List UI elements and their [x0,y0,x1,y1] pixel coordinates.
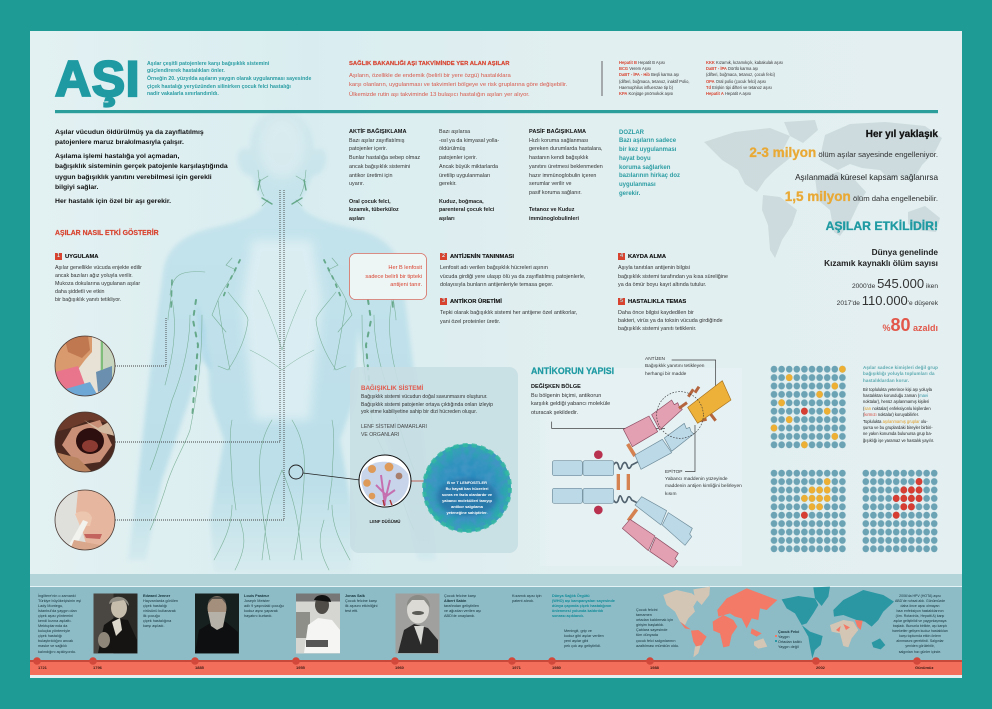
timeline 1980 note [564,629,604,648]
stats: deaths prevented [749,129,938,335]
step 5: bakteri, virüs ya da toksin vücuda girdiğinde [618,318,723,324]
timeline WHO: sonrası açıklandı. [552,614,584,618]
step 5: HASTALIKLA TEMAS [628,299,686,305]
timeline 1721 [38,594,81,654]
variable region text: DEĞİŞKEN BÖLGE [531,384,581,390]
antigen text: herhangi bir madde [645,372,686,377]
text: vaccination calendar: Aşıların, özellikle de endemik (belirli bir yere özgü) hastalıklara [349,72,511,78]
timeline 1988: girişim başlatıldı. [636,623,664,627]
timeline today: (örn. Rotavirüs, Hepatit A) karşı [896,614,944,618]
timeline years: 1885 [195,665,204,670]
timeline years: 1721 [38,665,47,670]
step 3: Tepki olarak bağışıklık sistemi her antijene özel antikorlar, [440,310,577,316]
step 3 [440,298,577,325]
intro text: güçlendirerek hastalıkları önler. [147,68,225,74]
map legend: Yaygın değil [778,645,799,649]
timeline 1980 note: yeni aşılar gibi [564,639,588,643]
stats: deaths prevented: 2-3 milyon ölüm aşılar sayesinde engelleniyor. [749,145,938,160]
map: polio endemic [663,587,777,657]
active immunity: Bazı aşılar zayıflatılmış [349,138,404,144]
active immunity: kızamık, tüberküloz [349,207,399,213]
immune system text: BAĞIŞIKLIK SİSTEMİ [361,385,423,392]
doses: bazılarının hirkaç doz [619,173,680,179]
body figure [128,112,436,572]
herd immunity text [863,365,938,443]
timeline 1971: Kızamık aşısı için [512,594,542,598]
herd immunity text: (sarı noktalar) enfeksiyonlu kişilerden [863,406,931,411]
herd immunity text: Bir toplulukta yeterince kişi aşı yoluyla [863,387,932,392]
step 4: 4 [620,253,623,259]
lymphocyte cell [423,444,511,532]
passive immunity: PASİF BAĞIŞIKLAMA [529,129,586,135]
text: how vaccines work: Aşılama işlemi hastalığa yol açmadan, [55,153,179,160]
timeline Pasteur: adlı 9 yaşındaki çocuğu [244,604,284,608]
passive immunity: hastanın kendi bağışıklık [529,155,588,161]
text: how vaccines work: bağışıklık sisteminin gerçek patojenle karşılaştığında [55,163,228,170]
timeline Jenner: Hayvanlarda görülen [143,599,178,603]
step 4: bağışıklık sistemi tarafından ya kısa süreliğine [618,274,728,280]
timeline WHO: dünya çapında çiçek hastalığının [552,604,611,608]
timeline 1721: İngiltere'nin o zamanki [38,594,76,598]
timeline today: ABD'de ruhsat aldı. Günümüzde [895,599,945,603]
timeline Sabin: ABD'de onaylandı. [444,614,475,618]
step 1: 1 [57,253,60,259]
vaccine list 2: Td Erişkin tipi difteri ve tetanoz aşısı [706,85,772,90]
immune system description: Bağışıklık sistemi patojenler ortaya çıktığında onları izleyip [361,402,493,408]
vaccine list 2: (difteri, boğmaca, tetanoz, çocuk felci) [706,72,775,77]
stats: deaths prevented: Kızamık kaynaklı ölüm sayısı [824,258,938,268]
timeline Jenner [143,594,178,628]
inactive vaccines: patojenler içerir. [439,155,477,161]
herd immunity text: Aşılar sadece kimişleri değil grup [863,365,938,370]
doses [619,130,680,197]
stats: deaths prevented: Dünya genelinde [872,247,938,257]
inactive vaccines: parenteral çocuk felci [439,207,494,213]
timeline Salk [345,594,378,613]
step 4 [618,253,728,288]
antigen text: Bağışıklık yanıtını tetikleyen [645,364,704,369]
passive immunity: Hızlı koruma sağlanması [529,138,588,144]
immune system description: Bağışıklık sistemi vücudun doğal savunmasını oluşturur. [361,394,488,400]
doses: gerekir. [619,191,640,197]
map legend swatches [775,635,777,642]
timeline Sabin: Çocuk felcine karşı [444,594,476,598]
passive immunity [529,128,603,222]
timeline today: alınmasını gerektirdi. Salgınlar [896,639,944,643]
passive immunity: yanıtını üretmesi beklenmeden [529,164,603,170]
dot chart: unvaccinated cluster [770,469,846,553]
herd immunity text: bağışıklığı yoluyla toplumları da [863,371,935,376]
timeline today: salgınları hızı günler içinde. [899,650,941,654]
stats: deaths prevented: Aşılanmada küresel kapsam sağlanırsa [795,173,938,182]
timeline today: 2006'da HPV (HOTA) aşısı [899,594,941,598]
step 1: bir bağışıklık yanıtı tetikliyor. [55,297,121,303]
stats: deaths prevented: Her yıl yaklaşık [866,129,938,140]
step 1: daha şiddetli ve etkin [55,289,104,295]
text: how vaccines work: Aşılar vücudun öldürülmüş ya da zayıflatılmış [55,129,204,136]
passive immunity: gereken durumlarda hastalara, [529,146,602,152]
timeline Pasteur: kuduz aşısı yaparak [244,609,278,613]
text: vaccination calendar [349,72,567,98]
map legend: Çocuk Felci [778,630,799,634]
step 1 [55,253,142,303]
divider: vaccine list [602,61,603,96]
title: AŞI [55,51,140,107]
photo outline [55,412,115,472]
panel: antibody [540,368,742,566]
vaccine list 2: DaBT - İPA Dörtlü karma aşı [706,66,758,71]
step 2 [440,253,585,288]
lymph label [361,423,427,438]
herd immunity text: hastalıktan korunduğu zaman (mavi [863,393,928,398]
herd immunity text: ne yakın konumda bulunursa grup ba- [863,431,932,436]
lymph node pointer [289,465,426,481]
stats: deaths prevented: AŞILAR ETKİLİDİR! [826,219,938,233]
timeline Jenner: çiçek hastalığı [143,604,167,608]
callout text: Her B lenfosit [388,265,422,271]
timeline Jenner: virüsünü kullanarak [143,609,176,613]
timeline 1971 [512,594,542,603]
doses: DOZLAR [619,130,644,136]
heading: how it works: AŞILAR NASIL ETKİ GÖSTERİR [55,230,159,237]
step 2: 2 [442,253,445,259]
active immunity: aşıları [349,216,365,222]
active immunity: uyarır. [349,181,364,187]
herd immunity text: hastalıklardan korur. [863,378,909,383]
epitope text: EPİTOP [665,470,683,474]
vaccine list 2: Hepatit A Hepatit A aşısı [706,91,751,96]
passive immunity: hazır immünoglobulin içeren [529,173,596,179]
timeline 1988 [636,608,679,648]
doses: Bazı aşıların sadece [619,138,676,144]
callout text [365,265,422,288]
timeline 1721: maske ve sağlıklı [38,644,67,648]
step 2: Lenfosit adı verilen bağışıklık hücreleri aşının [440,265,548,271]
timeline 1988: çocuk felci salgınlarının [636,639,675,643]
timeline Sabin [444,594,481,618]
lymphocyte text: yabancı molekülleri tanıyıp [442,498,492,503]
active immunity [349,128,420,222]
panel: timeline background [30,574,962,678]
lymph node label: LENF DÜĞÜMÜ [370,519,400,524]
step 3: 3 [442,298,445,304]
variable region text [531,383,610,416]
lymphocyte text: yeteneğine sahiptirler. [446,510,488,515]
timeline years: 1960 [395,665,404,670]
step 1: Aşılar genellikle vücuda enjekte edilir [55,265,142,271]
inactive vaccines: Kuduz, boğmaca, [439,199,484,205]
step 3: yani özel proteinler üretir. [440,319,500,325]
passive immunity: Tetanoz ve Kuduz [529,207,574,213]
timeline Pasteur [244,594,284,618]
portrait: Jonas Salk [296,594,340,654]
step 2: dolayısıyla bunların antijenleriyle temasa geçer. [440,282,553,288]
step 1: Mukoza dokularına uygulanan aşılar [55,281,140,287]
timeline markers [33,657,921,665]
herd immunity text: noktalar), henüz aşılanmamış kişileri [863,399,929,404]
timeline Pasteur: Joseph Meister [244,599,270,603]
timeline years: 1796 [93,665,102,670]
portrait: Albert Sabin [396,594,440,654]
passive immunity: serumlar verilir ve [529,181,572,187]
lymphocyte text: B ve T LENFOSİTLER [447,480,487,485]
herd immunity text: şursa ve bu gruplardaki bireyler birbiri- [863,425,933,430]
inactive vaccines: üretilip uygulanmaları [439,173,490,179]
step 5: 5 [620,298,623,304]
timeline Sabin: Albert Sabin [444,599,466,603]
step 1: ancak bazıları ağız yoluyla verilir. [55,273,133,279]
inactive vaccines: Ancak büyük miktarlarda [439,164,498,170]
step 4: KAYDA ALMA [628,254,666,260]
text: how vaccines work [55,129,228,205]
timeline 1721: bulaştırıldığını ancak [38,639,73,643]
stats: deaths prevented: 1,5 milyon ölüm daha engellenebilir. [785,189,938,204]
world map background [704,120,942,258]
step 4: Aşıyla tanıtılan antijenin bilgisi [618,265,690,271]
timeline Jenner: Edward Jenner [143,594,170,598]
epitope text: maddenin antijen kimliğini belirleyen [665,484,742,489]
step 5: Daha önce bilgisi kaydedilen bir [618,310,694,316]
timeline 1988: tüm dünyada [636,633,658,637]
timeline today: karşı toplumda etkin önlem [899,634,941,638]
timeline WHO: (WHO) aşı kampanyaları sayesinde [552,599,615,603]
epitope text: Yabancı maddenin yüzeyinde [665,477,728,482]
immune system description [361,394,493,415]
vaccine list 1: KPA Konjüge pnömokok aşısı [619,91,673,96]
timeline 1988: Çocuk felcini [636,608,658,612]
step 1: UYGULAMA [65,254,98,260]
lymphocyte text: sonra en fazla olanlardır ve [442,492,492,497]
active immunity: Bunlar hastalığa sebep olmaz [349,155,420,161]
intro text [147,60,312,97]
map legend: Yaygın [778,635,790,639]
passive immunity: pasif koruma sağlanır. [529,190,582,196]
step 3: ANTİKOR ÜRETİMİ [450,299,502,305]
timeline 1721: Lady Montegu, [38,604,63,608]
vaccine list 1: Haemophilus influenzae tip b) [619,85,673,90]
step 5 [618,298,723,332]
timeline Sabin: tarafından geliştirilen [444,604,479,608]
step 4: ya da ömür boyu kayıt altında tutulur. [618,282,706,288]
dot chart: spread [862,469,938,553]
dotted connector lines [115,190,284,520]
map: polio today [782,587,894,658]
lymph vessels mirrored [282,170,414,570]
timeline Jenner: çiçek hastalığına [143,619,171,623]
timeline 1988: azaltılması mümkün oldu. [636,644,679,648]
timeline 1721: çiçek hastalığı [38,634,62,638]
vaccine list 2 [706,60,783,96]
timeline WHO [552,594,615,618]
callout text: sadece belirli bir tipteki [365,274,422,280]
lymphocyte text: antikor salgılama [451,504,483,509]
lymph label: VE ORGANLARI [361,432,399,438]
timeline today [892,594,948,654]
timeline 1988: tamamen [636,613,652,617]
inactive vaccines: gerekir. [439,181,457,187]
herd immunity text: (kırmızı noktalar) koruyabilirler. [863,412,919,417]
active immunity: antikor üretimi için [349,173,392,179]
timeline 1721: çiçek aşısı yöntemini [38,614,73,618]
timeline Pasteur: Louis Pasteur [244,594,269,598]
timeline Salk: Çocuk felcine karşı [345,599,377,603]
passive immunity: immünoglobulinleri [529,216,579,222]
timeline 1721: Türkiye büyükelçisinin eşi [38,599,81,603]
timeline today: aşılar geliştirildi ve yaygınlaşmaya [894,619,946,623]
timeline Jenner: karşı aşıladı. [143,624,165,628]
timeline years [38,665,934,670]
photo: oral vaccine [55,412,115,472]
antigen text [645,356,704,377]
lymph node [359,455,411,508]
antibody diagram [552,360,731,567]
stats: deaths prevented: 2017'de 110.000'e düşerek [837,293,938,308]
timeline WHO: önlenmesi yolunda kaldırıldı [552,609,603,613]
timeline Salk: Jonas Salk [345,594,365,598]
timeline 1980 note: kuduz gibi aşılar verilen [564,634,604,638]
epitope text: kısım [665,492,676,497]
active immunity: ancak bağışıklık sistemini [349,164,410,170]
vaccine list 1: (difteri, boğmaca, tetanoz, inaktif Polio, [619,79,690,84]
doses: koruma sağlarken [619,165,670,171]
variable region text: Bu bölgenin biçimi, antikorun [531,393,601,399]
timeline years: 1971 [512,665,521,670]
intro text: nadir vakalarla sınırlandırıldı. [147,91,219,97]
active immunity: patojenler içerir. [349,146,387,152]
lymphocyte text [442,480,492,515]
timeline years: 1980 [552,665,561,670]
callout box [350,254,426,300]
text: how vaccines work: bilgiyi sağlar. [55,184,98,191]
inactive vaccines: aşıları [439,216,455,222]
text: how vaccines work: Her hastalık için özel bir aşı gerekir. [55,198,171,205]
antigen text: ANTİJEN [645,357,665,362]
heading: vaccination calendar: SAĞLIK BAKANLIĞI AŞI TAKVİMİNDE YER ALAN AŞILAR [349,61,509,67]
timeline 1988: Çatılara sayesinde [636,628,667,632]
text: vaccination calendar: Ülkemizde rutin aşı takviminde 13 bulaşıcı hastalığın aşıları yer alıyor. [349,92,530,98]
text: vaccination calendar: karşı olanların, uygulanması ve takvimleri bölgeye ve risk gruplarına göre değişebilir. [349,82,567,88]
vaccine list 2: KKK Kızamık, kızamıkçık, kabakulak aşısı [706,60,783,65]
photo outline [55,336,115,396]
timeline today: daha önce aşısı olmayan [901,604,939,608]
intro text: Örneğin 20. yüzyılda aşıların yaygın olarak uygulanması sayesinde [147,76,311,82]
photo: nasal spray [55,490,115,550]
timeline Jenner: ilk çocuğu [143,614,160,618]
portrait: Edward Jenner [94,594,138,654]
lymphocyte text: Bu hayati kan hücreleri [446,486,488,491]
timeline 1971: patent alındı. [512,599,534,603]
inactive vaccines: -ısıl ya da kimyasal yolla- [439,138,499,144]
portrait: Louis Pasteur [195,594,239,654]
text: how vaccines work: uygun bağışıklık yanıtını verebilmesi için gerekli [55,174,212,181]
timeline 1721: kuluçka yöntemiyle [38,629,70,633]
inactive vaccines [439,129,499,222]
panel: immune system [350,367,518,553]
callout text: antijeni tanır. [390,282,422,288]
heading: antibody: ANTİKORUN YAPISI [531,366,614,376]
timeline 1721: kendi kızına aşılattı. [38,619,72,623]
timeline 1721: İstanbul'da yaygın olan [38,609,77,613]
timeline years: 2002 [816,665,825,670]
step 2: ANTİJENİN TANINMASI [450,254,514,260]
step 2: vücuda girdiği yere ulaşıp ölü ya da zayıflatılmış patojenlerle, [440,274,585,280]
timeline Salk: test etti. [345,609,358,613]
herd immunity text: Toplulukta aşılanmamış gruplar olu- [863,419,928,424]
herd immunity text: ğışıklığı işe yaramaz ve hastalık yayılır. [863,438,934,443]
vaccine list 1 [619,60,690,96]
timeline today: hareketler gelişen kuduz hastalıkları [892,629,948,633]
timeline years: 1988 [650,665,659,670]
intro text: çiçek hastalığı yeryüzünden silinirken çocuk felci hastalığı [147,84,291,90]
vaccine list 1: BCG Verem Aşısı [619,66,651,71]
active immunity: Oral çocuk felci, [349,199,391,205]
timeline WHO: Dünya Sağlık Örgütü [552,594,590,598]
photo outline [55,490,115,550]
text: how vaccines work: patojenlere maruz bırakılmasıyla çalışır. [55,139,184,146]
lymph vessels [150,170,282,570]
stats: deaths prevented: 2000'de 545.000 iken [852,276,938,291]
map legend: Ortadan kalktı [778,640,802,644]
timeline Pasteur: hayatını kurtardı. [244,614,272,618]
step 5: bağışıklık sistemi yanıtı tetiklenir. [618,326,696,332]
timeline 1980 note: Meningit, grip ve [564,629,592,633]
variable region text: karşılık geldiği yabancı moleküle [531,401,610,407]
photo: injection [55,336,115,396]
timeline years: 1955 [296,665,305,670]
map legend [778,630,802,649]
intro text: Aşılar çeşitli patojenlere karşı bağışıklık sistemini [147,60,269,66]
vaccine list 2: OPA Oral polio (çocuk felci) aşısı [706,79,766,84]
vaccine list 1: DaBT - İPA - Hib Beşli karma aşı [619,72,679,77]
immune system description: yok etme kabiliyetine sahip bir dizi hücreden oluşur. [361,409,477,415]
timeline 1980 note: pek çok aşı geliştirildi. [564,644,601,648]
stats: deaths prevented: %80 azaldı [882,315,938,335]
active immunity: AKTİF BAĞIŞIKLAMA [349,129,406,135]
variable region text: oturacak şekildedir. [531,410,578,416]
timeline 1721: Mektuplarında da [38,624,67,628]
timeline today: yeniden görülebilir, [905,644,935,648]
lymph label: LENF SİSTEMİ DAMARLARI [361,424,427,430]
epitope text [665,469,742,497]
dot chart: protected [770,365,846,449]
doses: uygulanması [619,182,656,188]
doses: hayat boyu [619,156,651,162]
timeline years: Günümüz [915,665,933,670]
timeline today: başladı. Bununla birlikte, aşı karşıtı [893,624,947,628]
timeline 1988: ortadan kaldırmak için [636,618,673,622]
doses: bir kez uygulanması [619,147,676,153]
inactive vaccines: Bazı aşılarsa [439,129,470,135]
inactive vaccines: öldürülmüş [439,146,465,152]
vaccine list 1: Hepatit B Hepatit B Aşısı [619,60,665,65]
timeline Salk: ilk aşısını etkinliğini [345,604,378,608]
panel: header rule [55,110,938,113]
timeline 1721: kalındığını açıklıyordu. [38,650,76,654]
timeline today: bazı enfeksiyon hastalıklarının [896,609,944,613]
timeline Sabin: ve ağızdan verilen aşı [444,609,481,613]
